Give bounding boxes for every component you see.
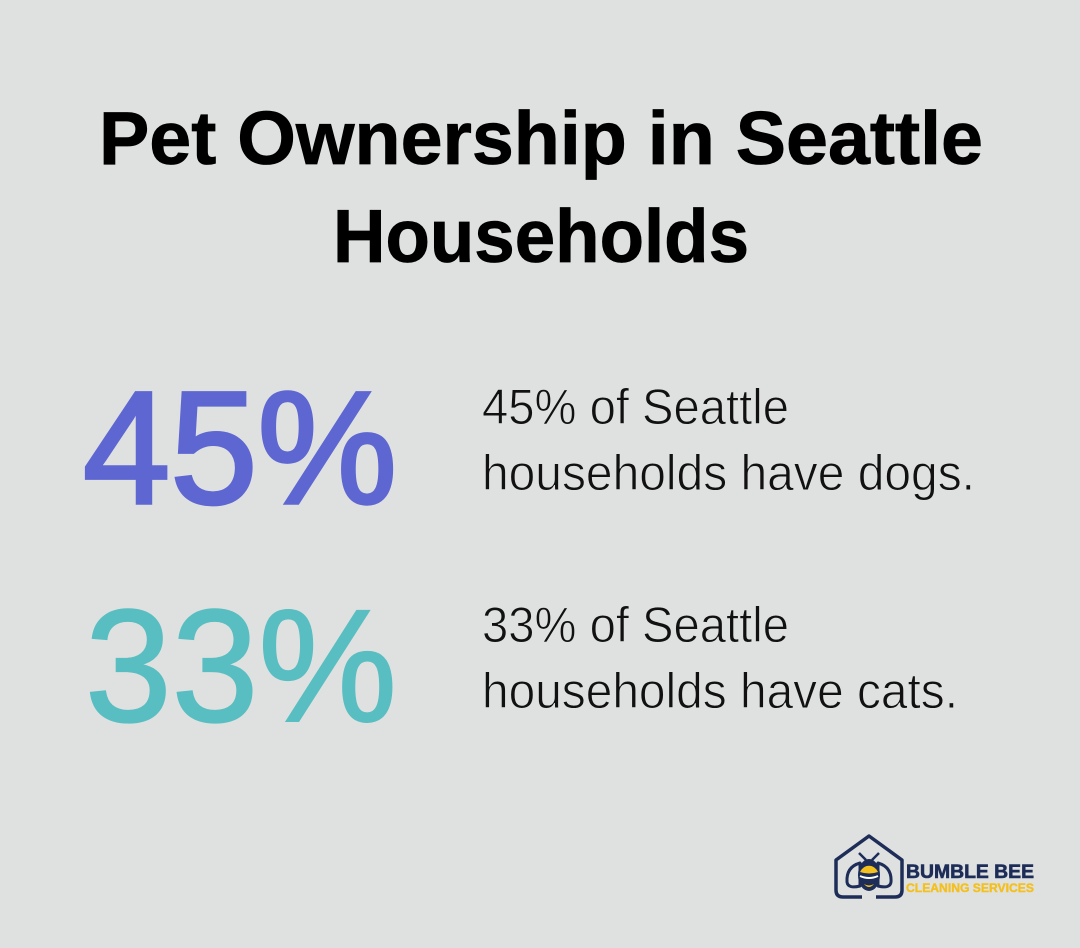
description: dogs bbox=[482, 379, 975, 501]
big number: 45%: 45% bbox=[83, 358, 397, 537]
logo tagline: CLEANING SERVICES bbox=[906, 881, 1034, 895]
description: cats: 33% of Seattle bbox=[482, 597, 789, 653]
title bbox=[99, 96, 983, 278]
big number: 33%: 33% bbox=[85, 576, 397, 755]
logo wordmark: BUMBLE BEE bbox=[906, 862, 1034, 883]
logo: Bumble Bee Cleaning Services bbox=[836, 836, 1034, 897]
title: Households bbox=[333, 194, 749, 278]
description: dogs: 45% of Seattle bbox=[482, 379, 789, 435]
stat: 33% cats bbox=[85, 576, 958, 755]
description: dogs: households have dogs. bbox=[482, 445, 975, 501]
title: Pet Ownership in Seattle bbox=[99, 96, 983, 180]
stat: 45% dogs bbox=[83, 358, 975, 537]
icon: house with bee bbox=[836, 836, 902, 897]
description: cats bbox=[482, 597, 958, 719]
description: cats: households have cats. bbox=[482, 663, 958, 719]
